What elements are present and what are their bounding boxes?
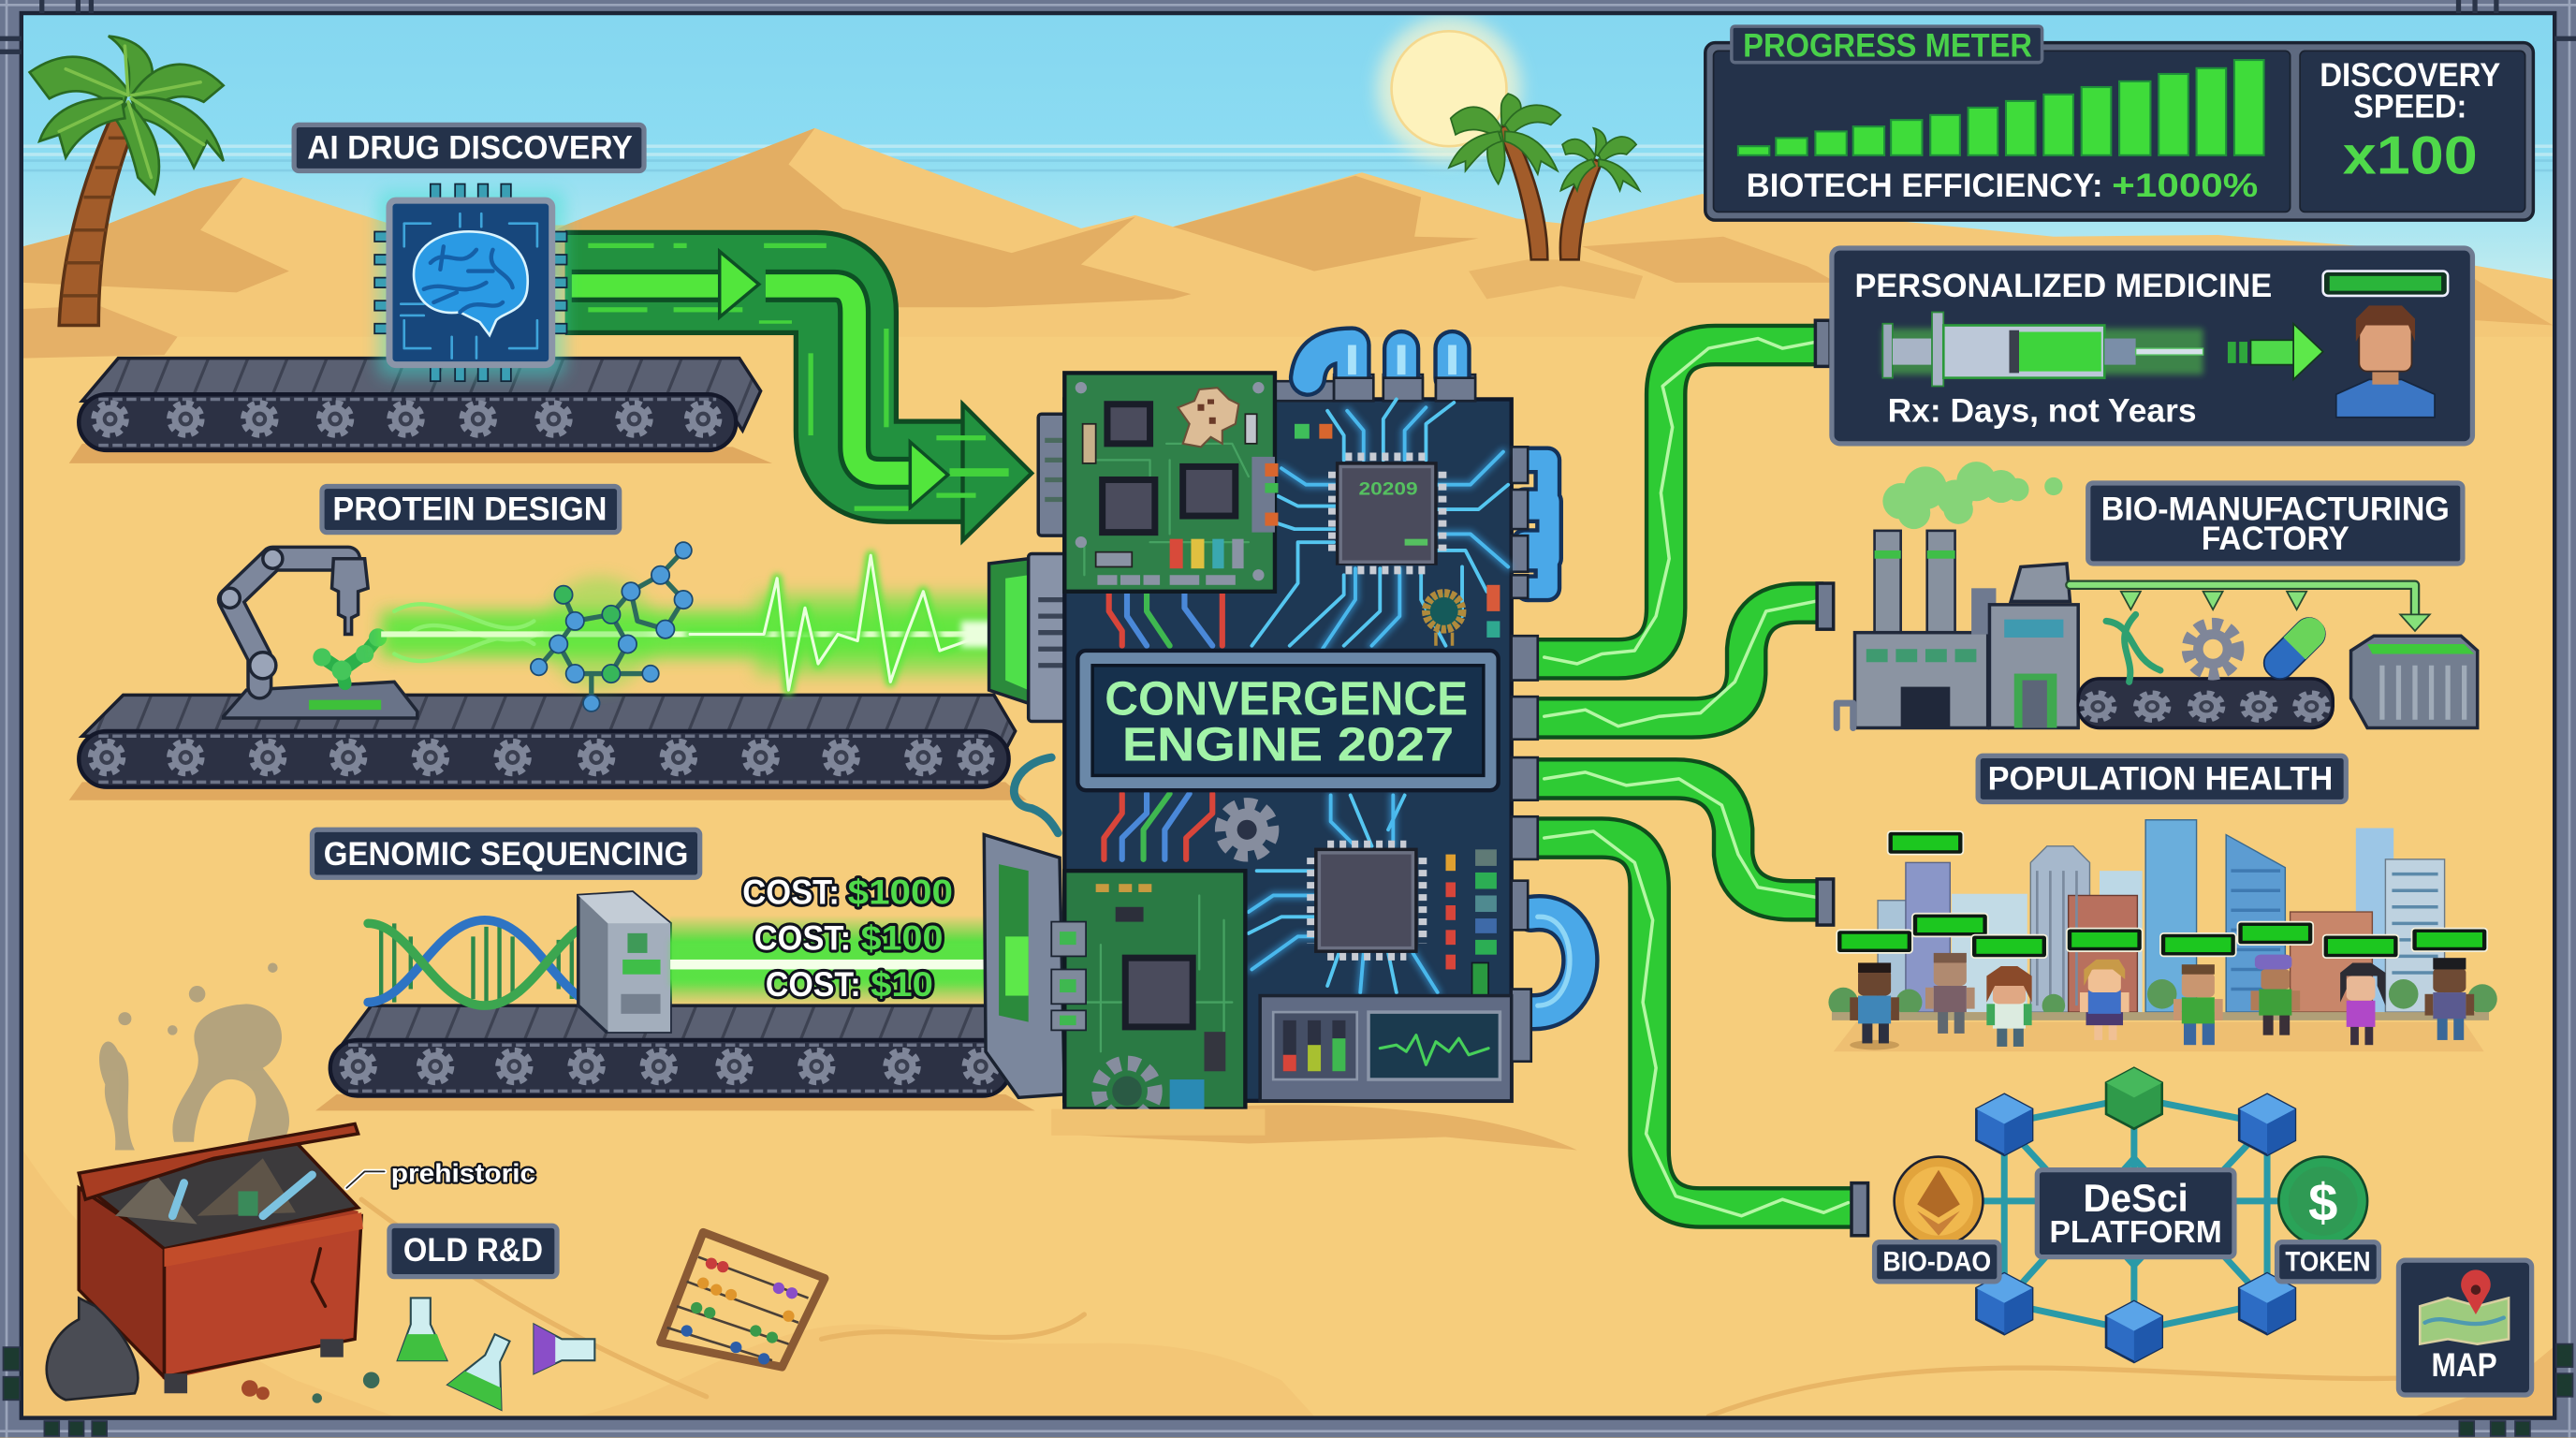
- icon: robot arm with protein: [220, 549, 417, 718]
- cost: 1000: COST:: [742, 873, 840, 911]
- gear: mid: [1222, 805, 1271, 855]
- icon: left palm tree: [30, 37, 224, 325]
- node: upper right: [2239, 1094, 2295, 1155]
- node: bottom: [2106, 1301, 2162, 1362]
- cost labels: [742, 873, 953, 1004]
- icon: cookie: [1178, 388, 1238, 447]
- circuit board: top left: [1064, 373, 1278, 592]
- engine title display: ENGINE 2027: [1122, 718, 1454, 771]
- coin: token: $: [2308, 1173, 2337, 1232]
- platform box: PLATFORM: [2049, 1215, 2222, 1250]
- icon: factory: [1837, 462, 2478, 727]
- panel: personalized medicine: [1832, 248, 2472, 444]
- LED column: [1445, 849, 1497, 999]
- cost: 10: $10: [871, 965, 933, 1004]
- label: population health: POPULATION HEALTH: [1988, 760, 2333, 797]
- label: old R&D: OLD R&D: [403, 1232, 543, 1269]
- label: bio-manufacturing factory: FACTORY: [2202, 521, 2349, 557]
- circuit board: bottom left: [1051, 871, 1265, 1136]
- small conveyor: [2078, 679, 2333, 727]
- panel: personalized medicine: PERSONALIZED MEDICINE: [1855, 268, 2272, 304]
- bar chart: [1738, 60, 2264, 155]
- energy beam: genomic: [670, 916, 1023, 1005]
- cost: 1000: [742, 873, 953, 911]
- engine: left input housings: [984, 414, 1068, 1097]
- icon: right palm trees: [1449, 94, 1640, 259]
- circuit glow: [1249, 407, 1508, 992]
- discovery speed text: x100: [2343, 126, 2478, 186]
- icon: gear: [2188, 624, 2237, 674]
- person 1: [1837, 930, 1912, 1049]
- icon: DNA helix: [368, 920, 601, 1005]
- cost: 1000: $1000: [848, 873, 953, 911]
- label: bio-manufacturing factory: [2088, 483, 2463, 564]
- icon: sequencer server: [578, 892, 670, 1032]
- chip: upper: [1329, 457, 1444, 570]
- person 2: [1912, 914, 1988, 1034]
- icon: syringe: [1882, 312, 2203, 386]
- wires: [1104, 592, 1222, 859]
- blue pipes: right: [1512, 447, 1580, 1062]
- garbage bag: [47, 1298, 138, 1400]
- engine: main body: [1064, 345, 1580, 1101]
- icon: AI brain chip: [374, 184, 567, 381]
- engine title display: CONVERGENCE: [1105, 671, 1468, 725]
- discovery speed text: [2320, 57, 2500, 186]
- icon: molecule: [531, 542, 693, 712]
- gear: lower: [1099, 1064, 1155, 1119]
- coin: token: [2278, 1157, 2367, 1245]
- person 8: [2411, 929, 2487, 1040]
- icon: tipped flask: [447, 1326, 529, 1410]
- person 6: [2237, 922, 2313, 1035]
- small status lights: [1295, 424, 1500, 638]
- callout: prehistoric: prehistoric: [391, 1159, 535, 1188]
- discovery speed text: SPEED:: [2353, 89, 2466, 125]
- label: protein design: PROTEIN DESIGN: [332, 492, 607, 528]
- panel: progress meter: [1705, 26, 2533, 220]
- person 4: [2067, 929, 2143, 1040]
- caption: Rx: Days, not Years: [1888, 392, 2197, 429]
- person 7: [2323, 935, 2398, 1045]
- ring component: [1426, 594, 1462, 646]
- arrow: AI pipeline into engine: [565, 243, 1032, 540]
- efficiency text: BIOTECH EFFICIENCY:: [1747, 168, 2103, 204]
- cost: 100: COST:: [754, 919, 851, 958]
- chip: upper: 20209: [1358, 479, 1418, 499]
- green smoke: [1882, 462, 2063, 529]
- people with health bars: [1837, 831, 2487, 1049]
- blue pipes: top: [1275, 345, 1475, 401]
- cost: 100: $100: [861, 919, 943, 958]
- label: token: TOKEN: [2285, 1246, 2371, 1277]
- icon: smoke: [99, 962, 289, 1151]
- engine title display: [1077, 651, 1499, 790]
- node: lower right: [2239, 1273, 2295, 1334]
- icon: bin: [2351, 636, 2478, 727]
- icon: upright flask: [398, 1298, 446, 1360]
- engine: monitor console: [1260, 996, 1512, 1101]
- conveyor belt: protein design: [69, 695, 1027, 800]
- map button: [2398, 1260, 2532, 1395]
- top health bar: [1888, 831, 1963, 855]
- cost: 10: COST:: [766, 965, 861, 1004]
- icon: pill: [2258, 611, 2332, 685]
- conveyor belt: genomic sequencing: [315, 1005, 1035, 1110]
- label: bio-manufacturing factory: BIO-MANUFACTURING: [2101, 492, 2450, 528]
- health bar: [2323, 271, 2448, 296]
- tab: progress meter title: PROGRESS METER: [1743, 28, 2032, 65]
- label: bio-dao: BIO-DAO: [1882, 1246, 1991, 1277]
- city skyline: [1828, 820, 2497, 1051]
- platform box: DeSci: [2083, 1176, 2188, 1220]
- cost: 100: [754, 919, 943, 958]
- conveyor belt: AI drug discovery: [69, 359, 772, 463]
- coin: ethereum: [1895, 1157, 1983, 1245]
- output pipe and arrows: [2070, 585, 2430, 631]
- icon: patient: [2336, 305, 2435, 418]
- person 5: [2160, 933, 2236, 1045]
- output pipes: [1534, 320, 1868, 1236]
- arrow: to patient: [2228, 324, 2323, 379]
- label: genomic sequencing: GENOMIC SEQUENCING: [324, 836, 688, 873]
- person 3: [1971, 935, 2047, 1047]
- energy beam: protein: [381, 555, 1027, 690]
- cost: 10: [766, 965, 933, 1004]
- icon: dna: [2106, 614, 2160, 682]
- chip: lower: [1311, 844, 1423, 956]
- DeSci network: [1875, 1068, 2378, 1362]
- icon: dumpster: [47, 1123, 379, 1403]
- label: AI drug discovery: AI DRUG DISCOVERY: [307, 129, 633, 166]
- circuit traces: [1249, 399, 1508, 992]
- node: top: [2106, 1068, 2162, 1129]
- network links: [1939, 1097, 2323, 1331]
- discovery speed text: DISCOVERY: [2320, 57, 2500, 94]
- efficiency text: +1000%: [2112, 168, 2258, 204]
- sun: [1377, 17, 1521, 161]
- map button: MAP: [2432, 1347, 2497, 1384]
- platform box: [2037, 1170, 2234, 1257]
- node: upper left: [1976, 1094, 2032, 1155]
- icon: purple flask: [534, 1325, 594, 1373]
- node: lower left: [1976, 1273, 2032, 1334]
- icon: abacus: [661, 1232, 825, 1367]
- label: old R&D: [389, 1225, 557, 1277]
